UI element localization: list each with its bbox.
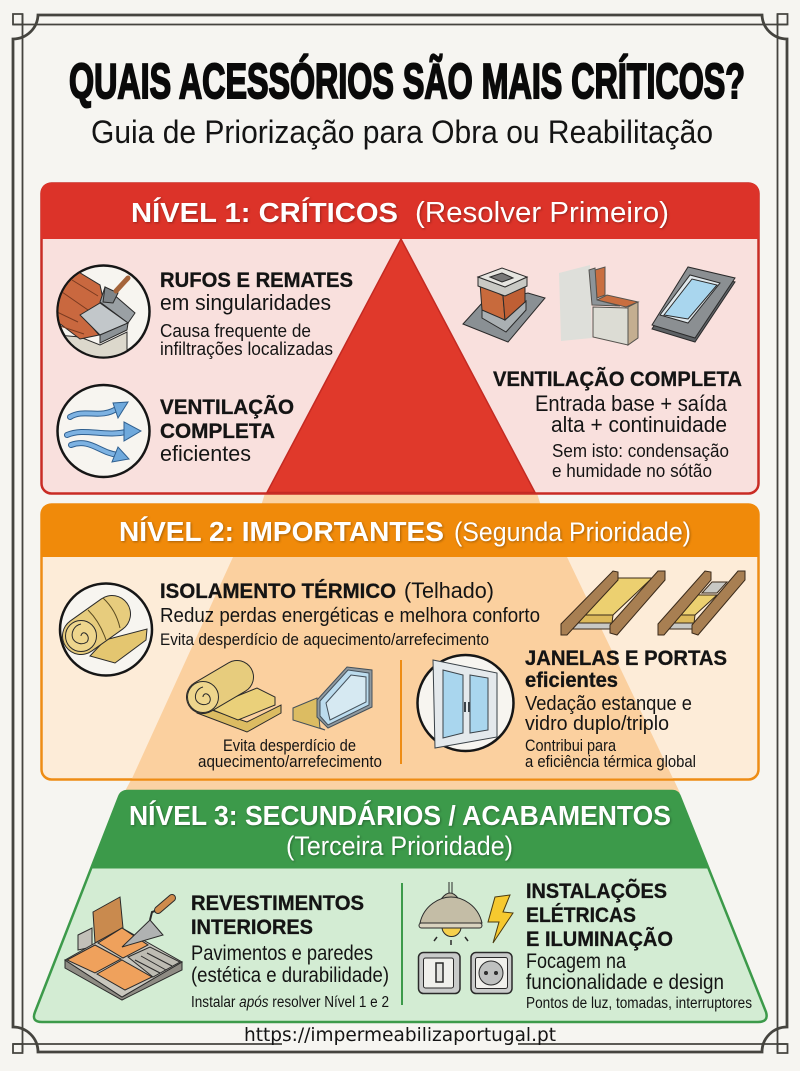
icon: light switch bbox=[418, 952, 460, 994]
pyramid tip bbox=[267, 239, 535, 492]
instalacoes text: ELÉTRICAS bbox=[526, 904, 636, 927]
level 2 header band bbox=[41, 504, 759, 557]
instalacoes text: Pontos de luz, tomadas, interruptores bbox=[526, 995, 752, 1012]
rufos text bbox=[160, 269, 353, 359]
divider level 3 bbox=[401, 883, 403, 1005]
rufos text: infiltrações localizadas bbox=[160, 339, 333, 359]
level 3 heading bbox=[129, 800, 671, 861]
insulation caption: aquecimento/arrefecimento bbox=[198, 753, 382, 771]
instalacoes text: E ILUMINAÇÃO bbox=[526, 928, 673, 951]
ventilation right text: Entrada base + saída bbox=[535, 391, 728, 416]
icon: insulation roll bbox=[60, 584, 152, 676]
level 2 heading: NÍVEL 2: IMPORTANTES bbox=[119, 516, 444, 547]
icon: insulation beams bbox=[561, 571, 745, 635]
insulation text bbox=[160, 578, 540, 649]
connector between level 1 and level 2 bbox=[261, 490, 541, 506]
level 3 header band bbox=[92, 792, 708, 868]
icon: ventilation arrows bbox=[58, 385, 150, 477]
rufos text: RUFOS E REMATES bbox=[160, 269, 353, 292]
revestimentos text bbox=[191, 892, 389, 1011]
icon: lamp bbox=[419, 882, 482, 945]
icon: chimney bbox=[463, 268, 545, 342]
revestimentos text: INTERIORES bbox=[191, 916, 313, 939]
ventilation left text bbox=[160, 396, 294, 466]
icon: skylight bbox=[652, 267, 735, 342]
panel: level 3 bbox=[34, 791, 767, 1022]
insulation text: Evita desperdício de aquecimento/arrefecimento bbox=[160, 631, 489, 649]
windows text: a eficiência térmica global bbox=[525, 753, 696, 771]
panel: level 2 bbox=[41, 504, 759, 780]
level 2 heading: (Segunda Prioridade) bbox=[454, 517, 691, 547]
level 1 heading: NÍVEL 1: CRÍTICOS bbox=[131, 197, 398, 228]
windows text: Vedação estanque e bbox=[525, 692, 692, 715]
ventilation right text bbox=[493, 368, 742, 481]
icon: wall flashing bbox=[559, 265, 638, 345]
instalacoes text bbox=[526, 879, 752, 1012]
ventilation right text: e humidade no sótão bbox=[552, 461, 712, 481]
ventilation right text: Sem isto: condensação bbox=[552, 441, 729, 461]
windows text bbox=[525, 647, 727, 771]
icon: roof flashing bbox=[55, 266, 150, 362]
panel: level 1 bbox=[41, 183, 759, 494]
level 3 heading: NÍVEL 3: SECUNDÁRIOS / ACABAMENTOS bbox=[129, 800, 671, 831]
revestimentos text: REVESTIMENTOS bbox=[191, 892, 364, 915]
icon: lightning bolt bbox=[488, 895, 513, 943]
rufos text: em singularidades bbox=[160, 290, 331, 315]
ventilation right text: VENTILAÇÃO COMPLETA bbox=[493, 368, 742, 391]
revestimentos text: (estética e durabilidade) bbox=[191, 964, 389, 987]
level 1 heading bbox=[131, 197, 669, 229]
level 1 header band bbox=[41, 183, 759, 239]
divider level 2 bbox=[400, 660, 402, 764]
windows text: eficientes bbox=[525, 669, 618, 692]
instalacoes text: INSTALAÇÕES bbox=[526, 879, 667, 903]
insulation text: (Telhado) bbox=[404, 578, 494, 603]
ventilation left text: eficientes bbox=[160, 441, 251, 466]
ventilation left text: COMPLETA bbox=[160, 420, 275, 443]
windows text: vidro duplo/triplo bbox=[525, 712, 669, 735]
connector between level 2 and level 3 bbox=[124, 778, 680, 793]
ventilation left text: VENTILAÇÃO bbox=[160, 396, 294, 419]
insulation caption bbox=[198, 737, 382, 771]
icon: power socket bbox=[471, 952, 512, 994]
revestimentos text: Instalar após resolver Nível 1 e 2 bbox=[191, 994, 389, 1011]
icon: tiles and trowel bbox=[65, 897, 182, 1000]
level 2 heading bbox=[119, 516, 691, 547]
icon: double glazing section bbox=[293, 667, 372, 730]
insulation caption: Evita desperdício de bbox=[223, 737, 356, 755]
icon: window bbox=[418, 655, 514, 751]
insulation text: ISOLAMENTO TÉRMICO bbox=[160, 580, 396, 603]
icon: insulation slabs bbox=[188, 677, 281, 732]
windows text: Contribui para bbox=[525, 737, 617, 755]
ventilation right text: alta + continuidade bbox=[551, 412, 727, 437]
website url: https://impermeabilizaportugal.pt bbox=[244, 1024, 556, 1046]
revestimentos text: Pavimentos e paredes bbox=[191, 942, 373, 965]
level 3 heading: (Terceira Prioridade) bbox=[286, 831, 513, 861]
level 1 heading: (Resolver Primeiro) bbox=[415, 197, 669, 229]
pyramid middle band bbox=[132, 557, 673, 778]
windows text: JANELAS E PORTAS bbox=[525, 647, 727, 670]
insulation text: Reduz perdas energéticas e melhora conforto bbox=[160, 604, 540, 627]
instalacoes text: Focagem na bbox=[526, 950, 626, 973]
subtitle: Guia de Priorização para Obra ou Reabilitação bbox=[91, 114, 713, 150]
instalacoes text: funcionalidade e design bbox=[526, 971, 724, 994]
rufos text: Causa frequente de bbox=[160, 321, 311, 341]
